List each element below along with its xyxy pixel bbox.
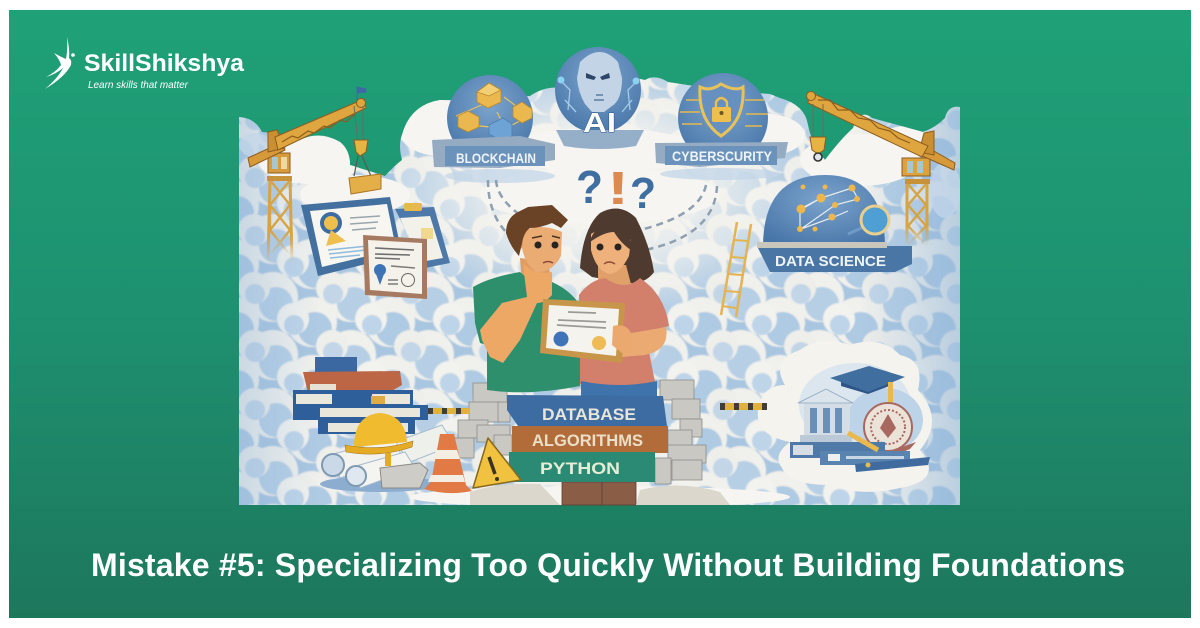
- cloud: bottom right: [758, 341, 932, 492]
- icon: shield and padlock: [700, 84, 743, 136]
- globe: [555, 47, 641, 133]
- book stack: [507, 395, 668, 482]
- jeans: [581, 381, 657, 398]
- hazard tape left: [428, 408, 470, 414]
- panel: AI: [555, 47, 644, 149]
- ear: [513, 236, 523, 250]
- stone block: [380, 463, 428, 488]
- icon: cubes: [456, 83, 532, 140]
- eyes and mouth: [532, 236, 560, 263]
- dome: [763, 175, 885, 247]
- plinth: [757, 246, 912, 272]
- crane: right: [806, 92, 955, 245]
- icon: magnifier: [848, 206, 889, 234]
- platform: [556, 130, 644, 149]
- icon: ladder: [721, 222, 751, 317]
- arm: [620, 327, 667, 357]
- label: CYBERSCURITY: [672, 148, 773, 164]
- dashed connectors: [488, 180, 717, 250]
- face: [522, 227, 562, 272]
- book: Python: PYTHON: [540, 459, 620, 478]
- brand name: SkillShikshya: [84, 50, 244, 77]
- arm and hand: [480, 264, 552, 363]
- book: Database: DATABASE: [542, 405, 636, 424]
- man: [473, 205, 580, 392]
- icon: traffic cone: [424, 434, 472, 493]
- panel: Cybersecurity: [655, 73, 788, 167]
- shirt: [579, 278, 669, 388]
- icon: question and exclamation marks: [576, 161, 656, 218]
- crane: left: [248, 87, 381, 262]
- woman: [579, 209, 669, 398]
- clouds backdrop: [239, 77, 960, 505]
- label: BLOCKCHAIN: [456, 150, 536, 166]
- book: Database: [507, 395, 667, 426]
- icon: graduation cap: [830, 366, 905, 403]
- icon: hard hat: [345, 413, 413, 466]
- icon: university building: [798, 389, 853, 442]
- globe: [678, 73, 768, 163]
- icon: question and exclamation marks: !: [607, 162, 629, 214]
- icon: warning triangle: [473, 438, 521, 488]
- globe: [447, 75, 533, 161]
- plinth: [432, 136, 555, 168]
- logo: SkillShikshya: [45, 37, 244, 91]
- blueprint rolls: [320, 425, 454, 492]
- award certificate: [301, 197, 402, 276]
- rubble ground: [470, 484, 730, 505]
- panel: cloud illustration: [235, 40, 965, 510]
- clipboard: [395, 203, 450, 268]
- hair: [506, 205, 568, 256]
- face: [591, 228, 631, 274]
- icon: network: [796, 184, 860, 232]
- icon: hanging crate: [349, 174, 381, 194]
- panel: Blockchain: [432, 75, 555, 168]
- icon: certificates group: [301, 197, 450, 299]
- label: DATA SCIENCE: [775, 253, 886, 270]
- bangs: [590, 221, 634, 252]
- icon: question and exclamation marks: ?: [630, 169, 656, 218]
- panel: Data Science: [757, 175, 912, 272]
- hand: [612, 325, 633, 353]
- icon: question and exclamation marks: ?: [576, 161, 603, 213]
- icon: robot face: [558, 52, 640, 112]
- book: Algorithms: ALGORITHMS: [532, 431, 643, 450]
- heading: Mistake #5: Specializing Too Quickly Without Building Foundations: [91, 547, 1125, 583]
- book: Python: [509, 452, 655, 482]
- plinth: [655, 142, 788, 167]
- book: Algorithms: [512, 426, 668, 453]
- neck: [598, 265, 632, 288]
- left book pile: [293, 357, 428, 434]
- rubble: right stones: [655, 380, 706, 484]
- hair back: [580, 209, 654, 283]
- neck: [520, 258, 552, 285]
- framed certificate: [363, 235, 427, 299]
- rubble: left stones: [452, 383, 512, 458]
- shirt: [473, 272, 580, 392]
- books and diploma: [790, 433, 930, 472]
- hazard tape right: [720, 403, 767, 410]
- eyes and mouth: [596, 244, 622, 264]
- icon: circuit lines: [680, 100, 768, 126]
- tagline: Learn skills that matter: [88, 79, 188, 91]
- framed certificate held by couple: [540, 299, 633, 363]
- icon: college seal: [864, 403, 916, 458]
- pit bricks: [562, 482, 636, 505]
- icon: leaping figure: [45, 37, 75, 89]
- label: AI: [583, 107, 616, 138]
